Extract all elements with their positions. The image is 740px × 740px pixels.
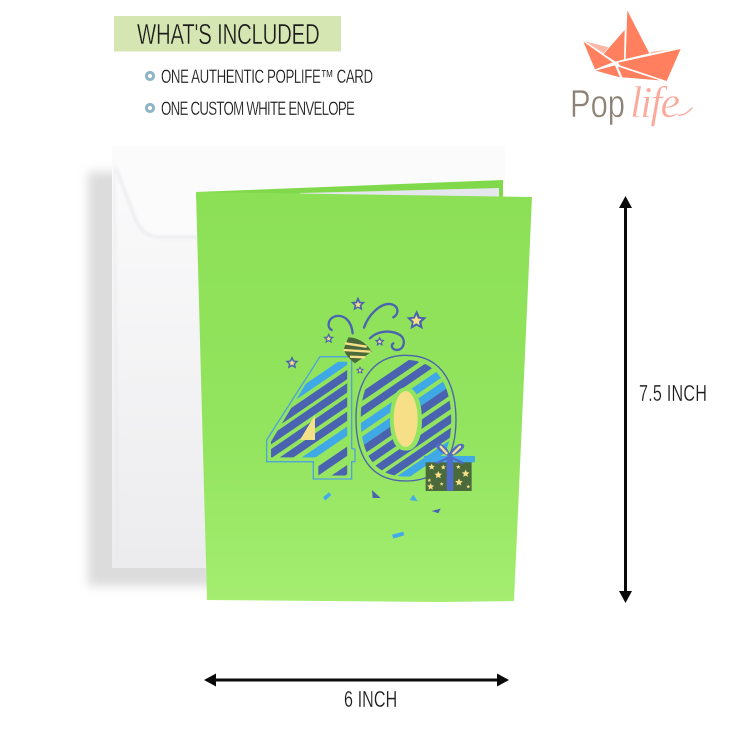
bullet text 1: ONE AUTHENTIC POPLIFE™ CARD [161,67,373,88]
logo word: life: life [630,78,680,127]
gift box [424,444,475,491]
panel: what's included [114,16,373,120]
card back panel [196,180,503,199]
width label: 6 INCH [344,687,397,713]
bullet icon 1 [146,72,154,80]
height arrow [619,196,632,603]
logo boat [583,11,681,81]
party popper [344,337,372,363]
logo word: pop: Pop [570,83,625,126]
number 4 triangle [300,415,315,440]
envelope [112,146,505,568]
envelope inner edge [114,170,118,560]
number 0 stripes [360,360,452,476]
envelope shadow [88,172,213,586]
flap shadow [116,168,200,237]
number 4 stripes [271,362,348,476]
stars [285,297,427,374]
bullet text 2: ONE CUSTOM WHITE ENVELOPE [161,99,355,120]
streamers [329,304,404,350]
confetti [323,490,441,539]
envelope flap [112,146,505,236]
card front [196,192,532,602]
number 4 outline [267,357,355,479]
width arrow [204,674,509,686]
heading band [114,16,341,52]
number 0 centre [394,391,418,447]
height label: 7.5 INCH [639,381,707,407]
logo: poplife [570,11,692,127]
envelope body [112,146,505,568]
heading: WHAT'S INCLUDED [137,19,320,51]
number 0 outline [356,355,456,481]
infographic [84,10,706,707]
birthday number artwork [266,296,475,539]
logo flourish [678,108,692,115]
bullet icon 2 [146,104,154,112]
